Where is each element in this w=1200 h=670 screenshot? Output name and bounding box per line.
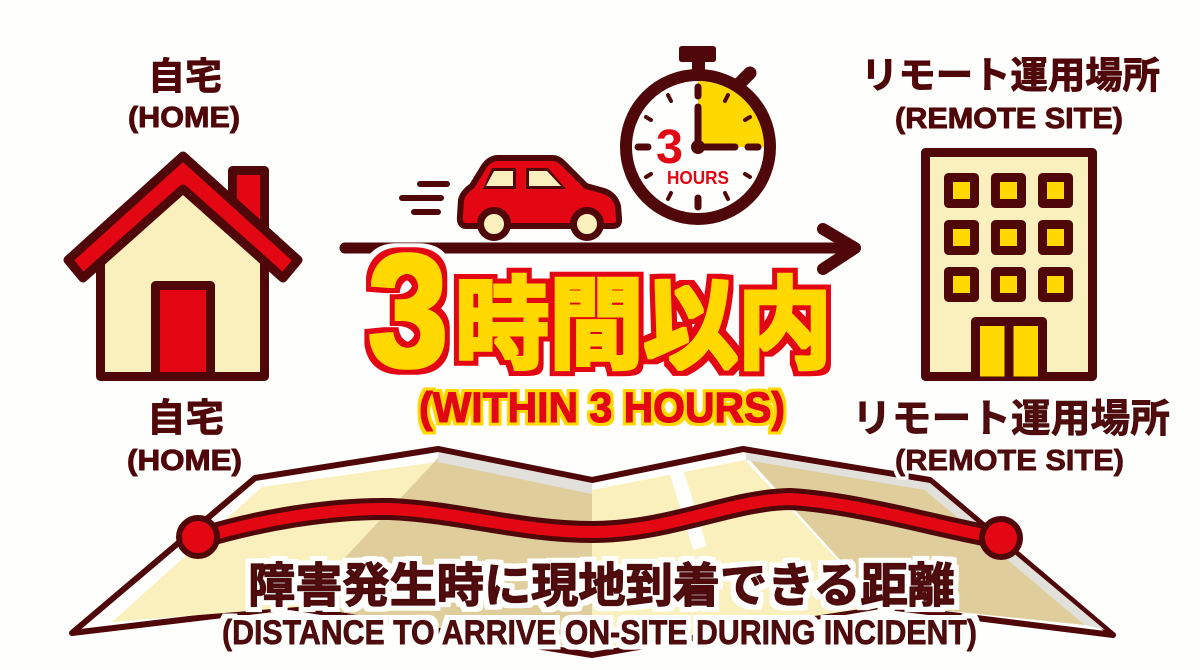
caption: 障害発生時に現地到着できる距離	[248, 559, 955, 612]
side button	[737, 73, 750, 86]
label: home bottom: 自宅	[147, 398, 224, 440]
map sheet	[72, 449, 1113, 655]
entrance	[976, 322, 1042, 376]
label: home top: (HOME)	[128, 102, 240, 134]
roof	[68, 156, 298, 278]
caption: (DISTANCE TO ARRIVE ON-SITE DURING INCIDENT)	[222, 614, 977, 652]
map fold: right cream panel	[592, 460, 880, 650]
route end	[982, 519, 1020, 557]
windows	[948, 178, 1068, 298]
headline: within 3 hours: 時間以内	[455, 270, 832, 382]
icon: stopwatch	[626, 46, 770, 219]
label: remote site top	[861, 55, 1160, 135]
door	[156, 286, 210, 376]
label: remote site bottom	[852, 398, 1170, 477]
label: home bottom: (HOME)	[127, 445, 242, 477]
icon: car	[402, 158, 619, 238]
map fold: left panel	[112, 462, 436, 622]
label: remote site bottom: リモート運用場所	[852, 398, 1170, 441]
icon: house	[68, 156, 298, 376]
face	[626, 75, 770, 219]
stopwatch unit: HOURS	[667, 168, 729, 188]
label: remote site top: リモート運用場所	[861, 55, 1160, 96]
headline: within 3 hours: 3	[368, 221, 448, 400]
map fold: right tan panel	[746, 456, 1085, 625]
label: home bottom	[127, 398, 242, 477]
map road	[676, 470, 700, 548]
speed lines	[402, 184, 447, 212]
label: remote site bottom: (REMOTE SITE)	[895, 445, 1124, 477]
arrow	[345, 229, 855, 269]
map fold: left tan panel	[300, 458, 592, 650]
headline: within 3 hours	[368, 221, 832, 400]
label: remote site top: (REMOTE SITE)	[895, 103, 1123, 135]
windows	[483, 168, 566, 189]
chimney	[232, 170, 264, 236]
caption	[222, 559, 977, 652]
wheels	[480, 210, 508, 238]
label: home top: 自宅	[148, 56, 222, 97]
stopwatch number: 3	[656, 121, 683, 174]
map	[72, 449, 1113, 655]
hands	[698, 107, 735, 147]
crown	[679, 46, 716, 74]
route line	[179, 499, 1020, 557]
icon: building	[926, 152, 1092, 376]
ticks	[638, 87, 758, 207]
subheading: within 3 hours: (WITHIN 3 HOURS)	[419, 384, 785, 432]
route start	[179, 518, 217, 556]
building body	[926, 152, 1092, 376]
house body	[100, 168, 264, 376]
car body	[460, 158, 619, 226]
label: home top	[128, 56, 240, 134]
elapsed wedge	[698, 81, 764, 147]
